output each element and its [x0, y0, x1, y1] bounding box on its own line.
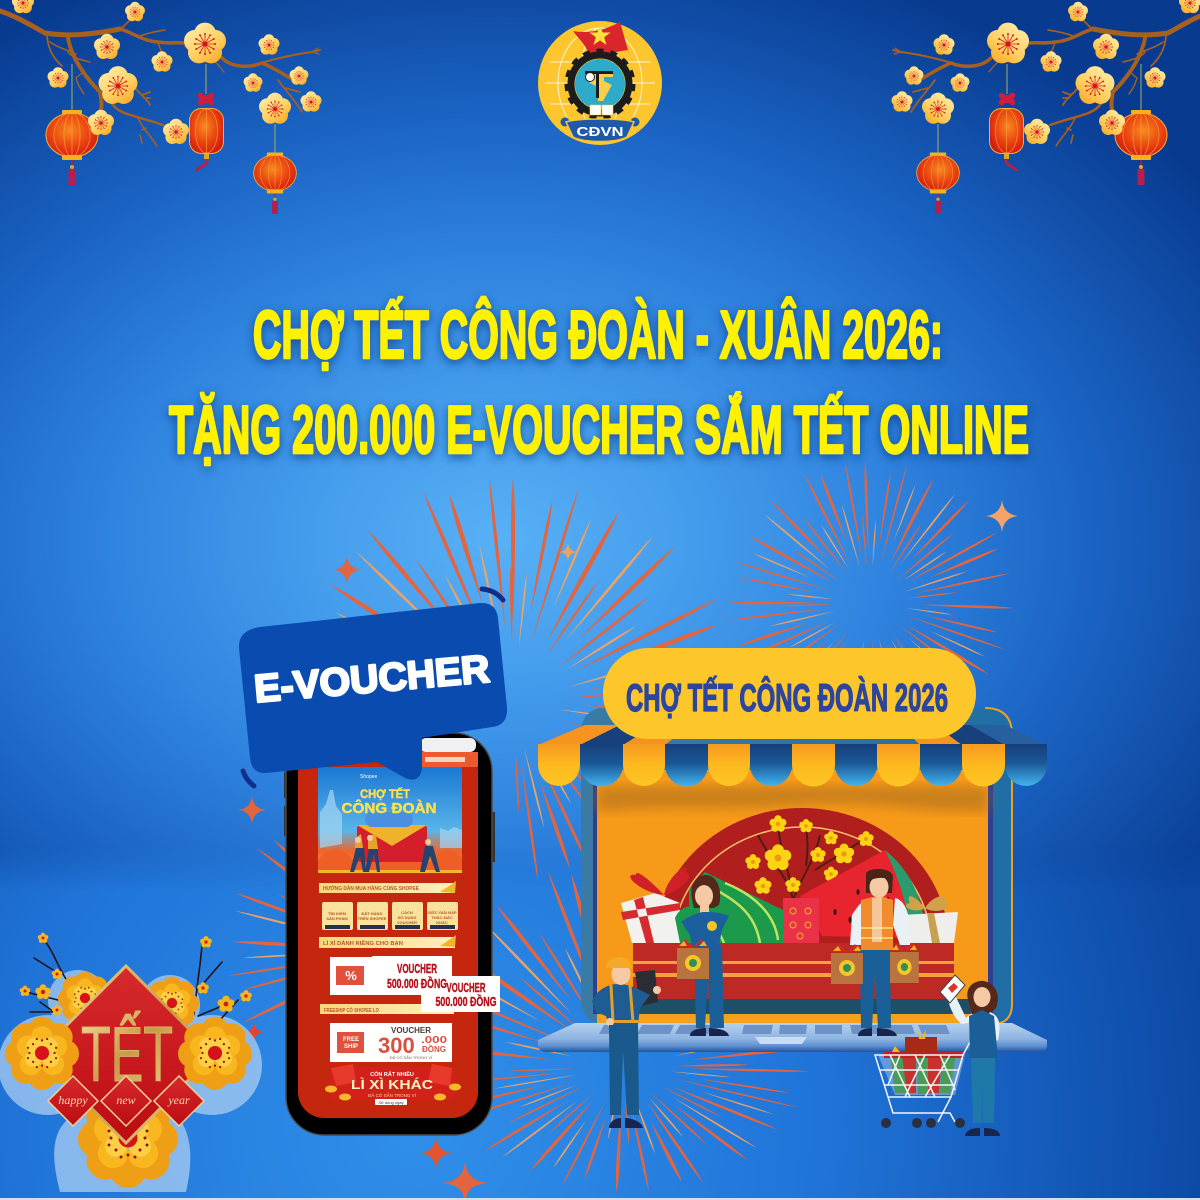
voucher coupon 300.000: SHIP — [344, 1044, 358, 1050]
guide bar and cards: ĐẶT HÀNG — [361, 911, 383, 916]
side flowers — [5, 1017, 79, 1090]
person: worker with tablet — [592, 957, 661, 1128]
guide bar and cards: SẢN PHẨM — [326, 916, 348, 921]
sign: Chợ Tết Công Đoàn 2026: CHỢ TẾT CÔNG ĐOÀN 2026 — [626, 675, 948, 720]
voucher coupon 300.000: .000 — [421, 1035, 448, 1046]
happy new year diamonds: new — [116, 1093, 136, 1107]
sparkle stars — [238, 500, 1018, 1198]
freeship bar — [320, 1004, 454, 1014]
freeship bar: FREESHIP CÓ SHOPEE LO — [324, 1006, 380, 1014]
left blossom branch with lanterns — [0, 0, 322, 214]
sign: Chợ Tết Công Đoàn 2026 — [603, 648, 976, 739]
emblem ribbon: CĐVN — [576, 124, 624, 139]
emblem gear — [567, 51, 633, 117]
voucher coupon 300.000: ĐÃ CÓ SẴN TRONG VÍ — [390, 1055, 433, 1060]
right blossom branch with lanterns — [892, 0, 1200, 214]
voucher coupon 300.000: VOUCHER — [391, 1026, 431, 1035]
left gift box — [621, 868, 689, 943]
guide bar and cards: HƯỚNG DẪN MUA HÀNG CÙNG SHOPEE — [323, 884, 419, 892]
voucher coupon 300.000: 300 — [378, 1033, 415, 1058]
person: man with shopping bags — [831, 869, 919, 1036]
guide bar and cards: LÌ XÌ DÀNH RIÊNG CHO BẠN — [323, 939, 403, 947]
guide bar and cards: VOUCHER — [397, 920, 417, 925]
phone screen — [298, 738, 478, 1118]
right gift box — [900, 896, 958, 943]
banner: Lì xì khác: CÒN RẤT NHIỀU — [370, 1070, 414, 1078]
laptop frame — [581, 708, 1012, 1024]
online shop laptop — [538, 708, 1047, 1052]
voucher coupon 500.000 label — [387, 961, 447, 991]
banner: Lì xì khác: LÌ XÌ KHÁC — [351, 1077, 434, 1092]
pale blue blobs — [0, 970, 262, 1192]
orange screen — [593, 770, 993, 1024]
happy new year diamonds: happy — [58, 1093, 88, 1107]
app hero: Shopee — [360, 774, 377, 780]
shopping cart — [875, 1029, 976, 1128]
app hero: CÔNG ĐOÀN — [342, 799, 436, 817]
guide bar and cards: THẮC MẮC — [431, 915, 453, 920]
Tết decoration, bottom left — [0, 933, 262, 1192]
person: woman with shopping bag — [677, 875, 729, 1036]
emblem book — [590, 105, 613, 115]
fireworks: upper right burst — [722, 450, 1013, 746]
fireworks: lower burst under the shop, upper half — [418, 849, 834, 1072]
banner: Lì xì khác: ĐÃ CÓ SẴN TRONG VÍ — [368, 1092, 417, 1098]
blossom twigs — [26, 940, 238, 1020]
bánh chưng — [675, 872, 783, 943]
voucher coupon 500.000 label: 500.000 ĐỒNG — [387, 976, 447, 991]
happy new year diamonds — [48, 1076, 204, 1126]
voucher coupon 500.000 card — [330, 956, 452, 995]
person: woman holding phone — [940, 975, 1000, 1136]
red counter — [597, 943, 988, 1014]
voucher coupon 300.000: FREE — [343, 1037, 359, 1043]
voucher coupon 300.000 — [330, 1023, 452, 1062]
logo: Công Đoàn Việt Nam emblem — [538, 21, 662, 145]
emblem flag — [573, 22, 628, 55]
title — [169, 296, 1029, 468]
red arch — [655, 808, 949, 945]
voucher coupon 500.000 label: VOUCHER — [397, 961, 437, 976]
red pouch — [783, 898, 819, 943]
guide bar and cards: GIỮC GIẢI ĐÁP — [427, 910, 457, 915]
awning scallops — [538, 744, 1047, 786]
smartphone mockup — [284, 733, 500, 1135]
awning roof — [538, 725, 1047, 745]
guide bar and cards: SỬ DỤNG — [398, 915, 416, 920]
fireworks: upper centre burst — [288, 470, 736, 882]
speech bubble: E-VOUCHER: E-VOUCHER — [253, 648, 491, 711]
voucher sticker overlapping phone edge: 500.000 ĐỒNG — [436, 994, 496, 1009]
voucher sticker overlapping phone edge — [421, 976, 500, 1012]
red diamond — [38, 966, 214, 1143]
guide bar and cards: TRÊN SHOPEE — [358, 916, 387, 921]
voucher sticker overlapping phone edge: VOUCHER — [446, 980, 486, 995]
happy new year diamonds: year — [167, 1093, 190, 1107]
app hero: CHỢ TẾT — [360, 786, 411, 801]
Tết word: TẾT — [81, 1010, 173, 1098]
guide bar and cards: TÌM KIẾM — [328, 911, 347, 916]
laptop base — [538, 1023, 1047, 1052]
banner: Lì xì khác: Sử dụng ngay — [378, 1100, 404, 1105]
voucher coupon 300.000: ĐỒNG — [422, 1044, 446, 1054]
back flowers — [58, 972, 112, 1025]
watermelon — [800, 850, 926, 938]
voucher coupon 500.000 card: % — [345, 968, 357, 983]
speech bubble: E-VOUCHER — [239, 589, 507, 786]
guide bar and cards: KHÁC — [436, 920, 448, 925]
fireworks: lower burst under the shop, lower half — [438, 1067, 809, 1192]
banner: Lì xì khác — [325, 1064, 461, 1105]
guide bar and cards — [319, 881, 458, 948]
guide bar and cards: CÁCH — [401, 910, 413, 915]
fireworks: burst behind phone — [167, 719, 486, 1028]
apricot branch — [745, 815, 874, 900]
app hero — [318, 767, 462, 873]
phone body — [284, 733, 495, 1135]
